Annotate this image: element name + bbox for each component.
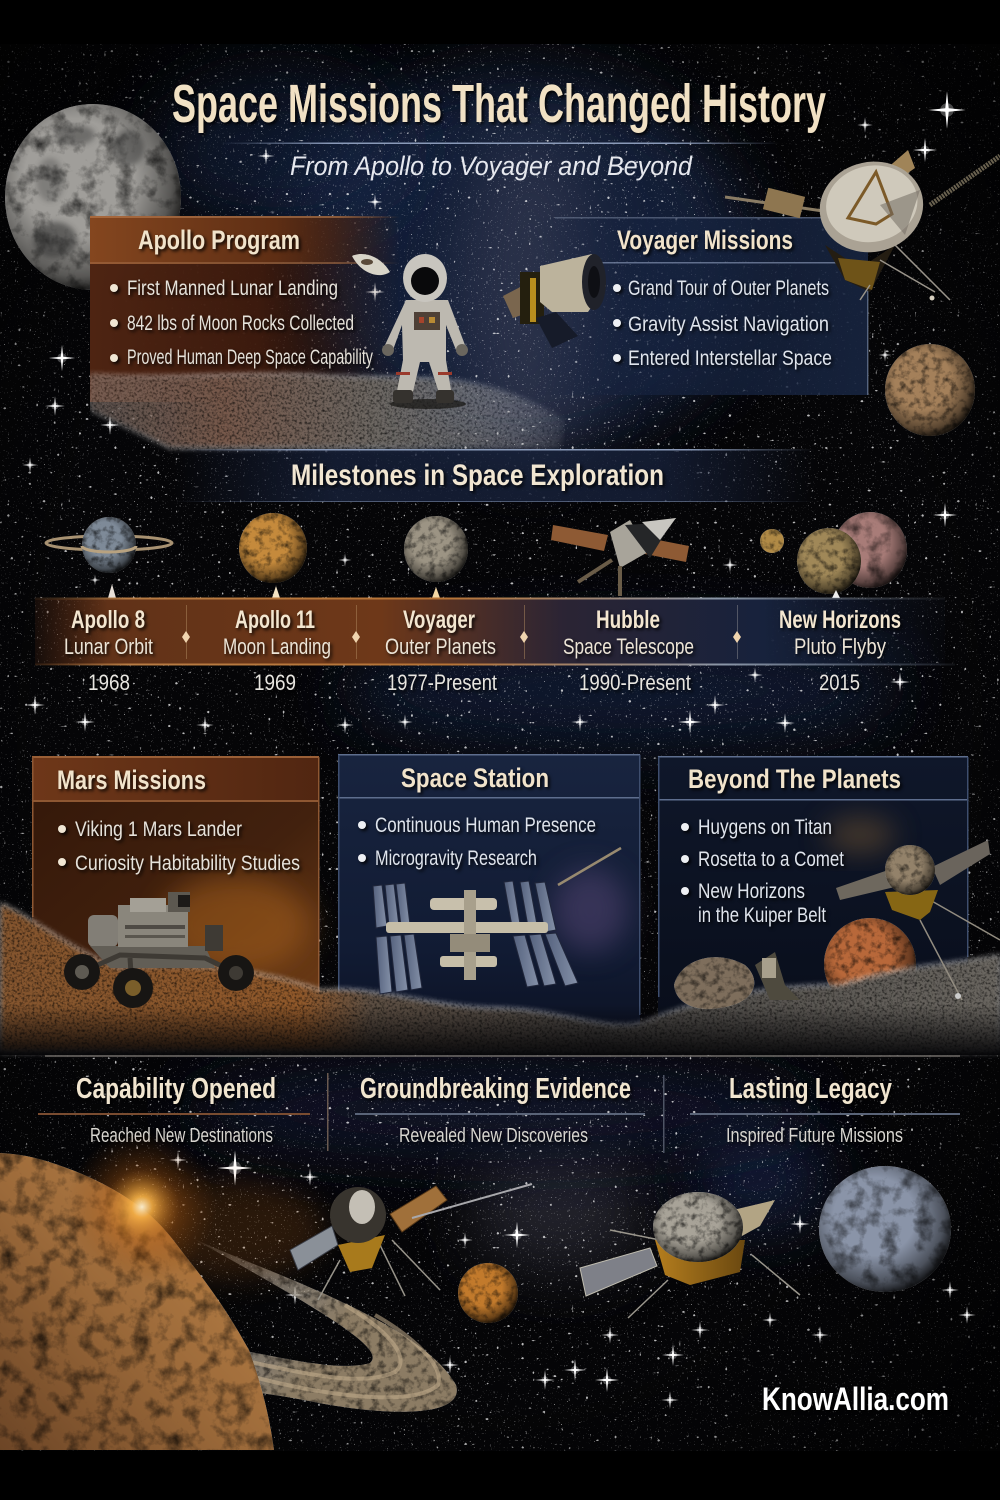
icon: planet apollo 11 xyxy=(239,513,307,598)
station bullets xyxy=(358,814,596,870)
icon: mars rover xyxy=(64,892,254,1008)
milestone: new horizons xyxy=(779,606,901,659)
heading: station: Space Station xyxy=(401,763,549,793)
voyager bullets: Entered Interstellar Space xyxy=(628,347,832,370)
icon: hubble telescope xyxy=(551,518,689,596)
apollo bullets: Proved Human Deep Space Capability xyxy=(127,346,373,369)
icon: planet rings xyxy=(190,1237,457,1412)
heading: apollo: Apollo Program xyxy=(138,225,300,255)
apollo bullets: 842 lbs of Moon Rocks Collected xyxy=(127,312,354,335)
voyager bullets: Grand Tour of Outer Planets xyxy=(628,277,829,300)
planet: beyond panel xyxy=(824,918,916,1010)
column dividers xyxy=(327,1073,664,1153)
beyond bullets: Huygens on Titan xyxy=(698,816,832,839)
planet: large ringed planet xyxy=(0,1153,274,1450)
section: milestones heading xyxy=(175,449,815,502)
planet: right of voyager xyxy=(885,344,975,436)
milestone: apollo 8: Apollo 8 xyxy=(71,606,145,634)
apollo bullets xyxy=(110,277,373,369)
column: groundbreaking evidence: Revealed New Discoveries xyxy=(399,1125,588,1147)
timeline years: 2015 xyxy=(819,670,860,695)
lunar ground xyxy=(90,374,565,448)
column: groundbreaking evidence: Groundbreaking Evidence xyxy=(360,1073,631,1105)
beyond bullets: Rosetta to a Comet xyxy=(698,848,844,871)
milestone: apollo 8: Lunar Orbit xyxy=(64,634,153,659)
milestone: voyager xyxy=(385,606,496,659)
mars bullets xyxy=(58,818,300,875)
section: milestones heading: Milestones in Space Exploration xyxy=(291,459,664,492)
column: lasting legacy: Inspired Future Missions xyxy=(726,1125,903,1147)
terrain: mars and asteroid ground xyxy=(0,903,1000,1055)
mars bullets: Viking 1 Mars Lander xyxy=(75,818,242,841)
milestone: new horizons: Pluto Flyby xyxy=(794,634,886,659)
beyond bullets xyxy=(681,816,844,927)
milestone: hubble xyxy=(563,606,694,659)
timeline years: 1990-Present xyxy=(579,670,691,695)
icon: satellite one xyxy=(290,1184,532,1300)
heading: mars: Mars Missions xyxy=(57,765,206,795)
apollo bullets: First Manned Lunar Landing xyxy=(127,277,338,300)
column: capability opened xyxy=(38,1073,310,1147)
column: lasting legacy: Lasting Legacy xyxy=(729,1073,892,1105)
milestone: apollo 11 xyxy=(223,606,331,659)
beyond bullets: New Horizons xyxy=(698,880,805,903)
heading: voyager: Voyager Missions xyxy=(617,225,793,255)
icon: astronaut xyxy=(352,254,468,409)
sun flare xyxy=(67,1132,325,1282)
timeline band xyxy=(35,598,955,666)
milestone: hubble: Hubble xyxy=(596,606,660,634)
column: capability opened: Capability Opened xyxy=(76,1073,276,1105)
beyond bullets: in the Kuiper Belt xyxy=(698,904,826,927)
milestone: hubble: Space Telescope xyxy=(563,634,694,659)
timeline years: 1969 xyxy=(254,670,296,695)
icon: voyager spacecraft xyxy=(725,150,1000,300)
milestone: new horizons: New Horizons xyxy=(779,606,901,634)
planet: small orange xyxy=(458,1263,518,1323)
panel: beyond the planets xyxy=(658,756,968,1017)
milestone: voyager: Outer Planets xyxy=(385,634,496,659)
subtitle: From Apollo to Voyager and Beyond xyxy=(290,151,693,181)
timeline years xyxy=(88,670,860,695)
icon: small voyager probe xyxy=(503,254,606,348)
station bullets: Microgravity Research xyxy=(375,847,537,870)
timeline years: 1977-Present xyxy=(387,670,497,695)
voyager bullets: Gravity Assist Navigation xyxy=(628,313,829,336)
milestone: voyager: Voyager xyxy=(403,606,475,634)
icon: titan probe xyxy=(836,840,1000,1000)
timeline years: 1968 xyxy=(88,670,130,695)
icon: asteroid and lander xyxy=(674,952,800,1009)
panel: mars missions xyxy=(32,756,320,1007)
column: capability opened: Reached New Destinations xyxy=(90,1125,273,1147)
icon: international space station xyxy=(373,848,621,994)
heading: beyond: Beyond The Planets xyxy=(688,764,901,794)
title rule xyxy=(220,142,780,144)
icon: satellite two xyxy=(580,1192,800,1318)
milestone: apollo 11: Moon Landing xyxy=(223,634,331,659)
milestone: apollo 11: Apollo 11 xyxy=(235,606,315,634)
planet: gray blue xyxy=(819,1166,951,1292)
mars bullets: Curiosity Habitability Studies xyxy=(75,852,300,875)
section: bottom rule xyxy=(45,1055,960,1057)
icon: planet voyager xyxy=(404,516,468,598)
panel: apollo program xyxy=(90,216,565,448)
panel: space station xyxy=(338,754,640,1035)
column: groundbreaking evidence xyxy=(355,1073,645,1147)
milestone: apollo 8 xyxy=(64,606,153,659)
icon: ringed planet apollo 8 xyxy=(46,517,172,598)
column: lasting legacy xyxy=(690,1073,960,1147)
panel: voyager missions xyxy=(530,217,868,395)
planet: moon xyxy=(5,104,181,290)
brand: knowallia: KnowAllia.com xyxy=(762,1381,949,1417)
station bullets: Continuous Human Presence xyxy=(375,814,596,837)
icon: pluto planets xyxy=(760,512,907,598)
voyager bullets xyxy=(613,277,832,370)
